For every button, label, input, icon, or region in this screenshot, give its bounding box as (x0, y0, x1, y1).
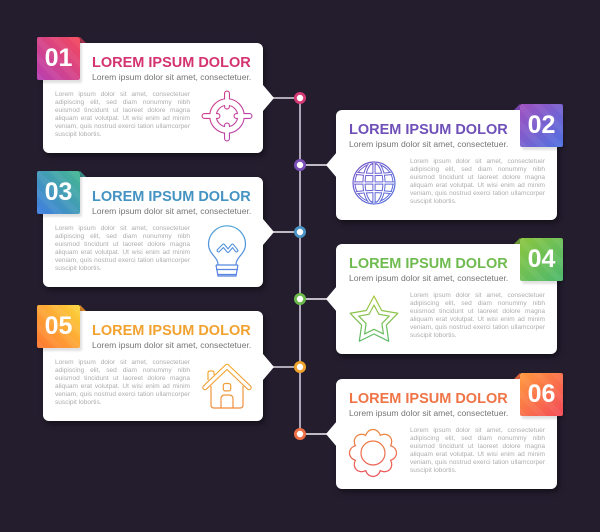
text block 06: suscipit lobortis. (410, 467, 457, 474)
heading 03: LOREM IPSUM DOLOR (92, 189, 251, 205)
text block 02: euismod tincidunt ut laoreet dolore magna (410, 174, 545, 181)
badge 03 (37, 171, 80, 214)
text block 06: euismod tincidunt ut laoreet dolore magna (410, 443, 545, 450)
heading 02: LOREM IPSUM DOLOR (349, 122, 508, 138)
text block 02 (410, 158, 545, 205)
text block 04 (410, 292, 545, 339)
panel: 06 (326, 373, 563, 493)
text block 03: euismod tincidunt ut laoreet dolore magna (55, 241, 190, 248)
text block 06: aliquam erat volutpat. Ut wisi enim ad minim (410, 451, 545, 458)
badge 02 (520, 104, 563, 147)
text block 03: adipiscing elit, sed diam nonummy nibh (55, 233, 190, 240)
heading 04: LOREM IPSUM DOLOR (349, 256, 508, 272)
icon: globe (352, 161, 396, 205)
text block 01: euismod tincidunt ut laoreet dolore magna (55, 107, 190, 114)
badge 04: 04 (528, 245, 555, 273)
badge 06 (520, 373, 563, 416)
icon: light bulb (208, 225, 246, 277)
subheading 03: Lorem ipsum dolor sit amet, consectetuer. (92, 206, 251, 216)
panel: 05 (37, 305, 274, 425)
text block 02: suscipit lobortis. (410, 198, 457, 205)
text block 02: veniam, quis nostrud exerci tation ullamcorper (410, 190, 545, 197)
text block 05: veniam, quis nostrud exerci tation ullamcorper (55, 391, 190, 398)
badge 01: 01 (45, 44, 72, 72)
badge 05 (37, 305, 80, 348)
text block 03 (55, 224, 190, 272)
text block 02: Lorem ipsum dolor sit amet, consectetuer (410, 158, 545, 164)
text block 06: veniam, quis nostrud exerci tation ullamcorper (410, 459, 545, 466)
icon: house (202, 364, 252, 409)
text block 06: adipiscing elit, sed diam nonummy nibh (410, 435, 545, 442)
subheading 04: Lorem ipsum dolor sit amet, consectetuer. (349, 273, 508, 283)
text block 05: Lorem ipsum dolor sit amet, consectetuer (55, 358, 190, 366)
heading 06: LOREM IPSUM DOLOR (349, 391, 508, 407)
panel: 02 (326, 104, 563, 224)
panel: 04 (326, 238, 563, 358)
timeline spine with nodes (273, 92, 327, 440)
badge 02: 02 (528, 111, 555, 139)
subheading 06: Lorem ipsum dolor sit amet, consectetuer. (349, 408, 508, 418)
text block 01: suscipit lobortis. (55, 131, 102, 138)
panel: 01 (37, 37, 274, 157)
text block 01: Lorem ipsum dolor sit amet, consectetuer (55, 90, 190, 98)
text block 05: adipiscing elit, sed diam nonummy nibh (55, 367, 190, 374)
icon: gear (348, 428, 398, 478)
text block 02: adipiscing elit, sed diam nonummy nibh (410, 166, 545, 173)
text block 02: aliquam erat volutpat. Ut wisi enim ad minim (410, 182, 545, 189)
subheading 05: Lorem ipsum dolor sit amet, consectetuer. (92, 340, 251, 350)
badge 06: 06 (528, 380, 555, 408)
text block 01: aliquam erat volutpat. Ut wisi enim ad minim (55, 115, 190, 122)
text block 04: euismod tincidunt ut laoreet dolore magna (410, 308, 545, 315)
icon: crosshair target (202, 90, 252, 142)
text block 04: aliquam erat volutpat. Ut wisi enim ad minim (410, 316, 545, 323)
text block 03: suscipit lobortis. (55, 265, 102, 272)
text block 04: adipiscing elit, sed diam nonummy nibh (410, 300, 545, 307)
text block 06 (410, 426, 545, 474)
text block 03: veniam, quis nostrud exerci tation ullamcorper (55, 257, 190, 264)
text block 03: aliquam erat volutpat. Ut wisi enim ad minim (55, 249, 190, 256)
text block 05: aliquam erat volutpat. Ut wisi enim ad minim (55, 383, 190, 390)
text block 04: suscipit lobortis. (410, 332, 457, 339)
text block 06: Lorem ipsum dolor sit amet, consectetuer (410, 426, 545, 434)
heading 05: LOREM IPSUM DOLOR (92, 323, 251, 339)
badge 03: 03 (45, 178, 72, 206)
text block 04: Lorem ipsum dolor sit amet, consectetuer (410, 292, 545, 298)
subheading 01: Lorem ipsum dolor sit amet, consectetuer. (92, 72, 251, 82)
text block 01: veniam, quis nostrud exerci tation ullamcorper (55, 123, 190, 130)
text block 05 (55, 358, 190, 406)
badge 05: 05 (45, 312, 72, 340)
text block 03: Lorem ipsum dolor sit amet, consectetuer (55, 224, 190, 232)
subheading 02: Lorem ipsum dolor sit amet, consectetuer. (349, 139, 508, 149)
panel: 03 (37, 171, 274, 291)
text block 05: suscipit lobortis. (55, 399, 102, 406)
badge 04 (520, 238, 563, 281)
text block 01: adipiscing elit, sed diam nonummy nibh (55, 99, 190, 106)
heading 01: LOREM IPSUM DOLOR (92, 55, 251, 71)
text block 04: veniam, quis nostrud exerci tation ullamcorper (410, 324, 545, 331)
icon: star (350, 295, 398, 342)
text block 05: euismod tincidunt ut laoreet dolore magna (55, 375, 190, 382)
badge 01 (37, 37, 80, 80)
text block 01 (55, 90, 190, 138)
